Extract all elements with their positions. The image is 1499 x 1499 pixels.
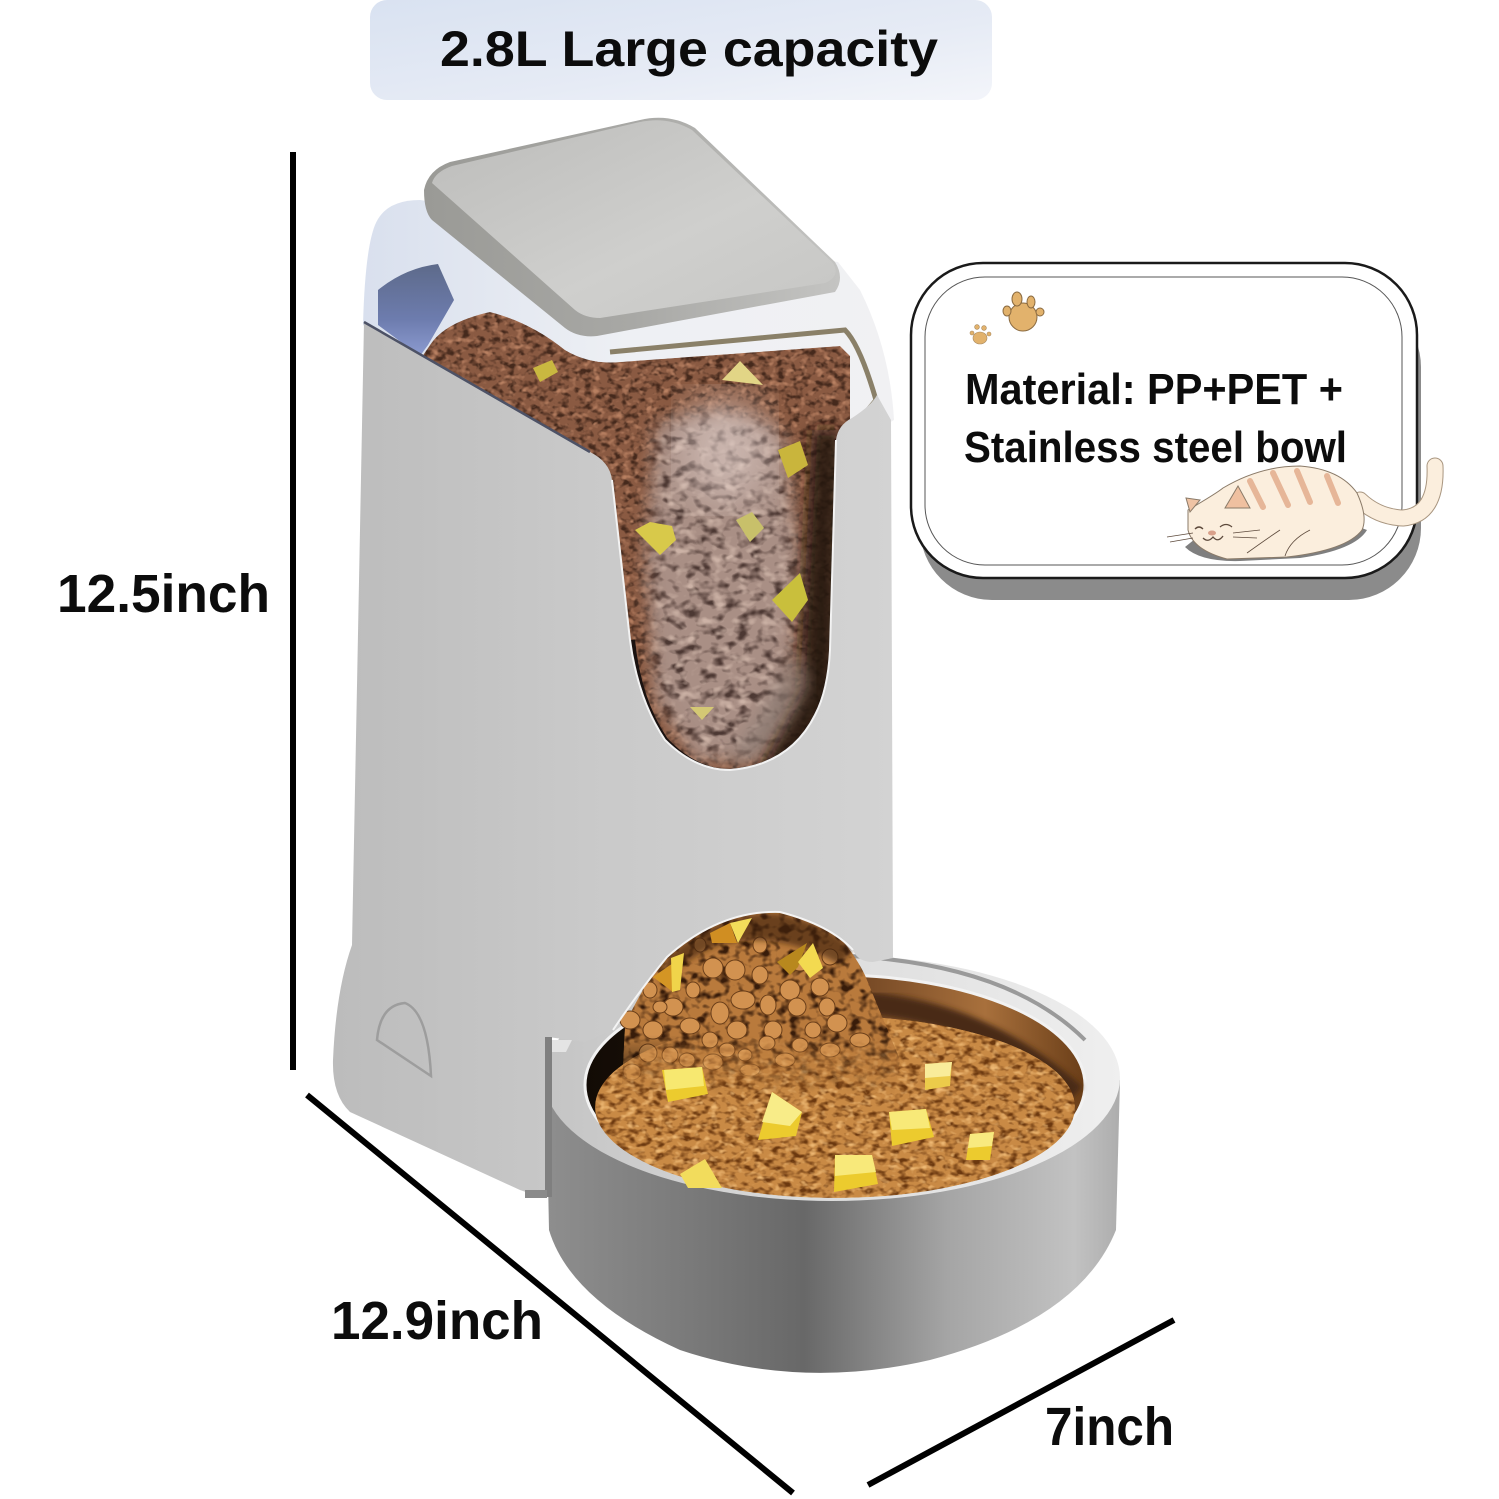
bowl interior (585, 975, 1085, 1195)
hopper stored food (420, 312, 850, 780)
material text (964, 365, 1347, 472)
hopper frame band (610, 330, 876, 432)
window white edge line (612, 440, 836, 770)
illustration: sleeping cat (1167, 466, 1435, 561)
arch white edge line (613, 912, 853, 1030)
hopper dark glass band (760, 430, 840, 772)
icon: small paw (970, 325, 991, 344)
bowl rim (544, 955, 1120, 1201)
dimension label: height: 12.5inch (57, 564, 270, 624)
material callout card (911, 263, 1435, 600)
bowl treat cubes (653, 918, 994, 1192)
material text: Material: PP+PET + (965, 365, 1343, 414)
cat body (1188, 466, 1364, 559)
dimension: width line (868, 1320, 1174, 1485)
falling kibble mound (620, 912, 900, 1092)
hopper food centre column (635, 404, 807, 768)
bowl kibble (595, 1016, 1075, 1198)
hopper blue reflection (378, 264, 454, 356)
bowl interior brown streak (850, 1002, 1075, 1095)
card inner line (925, 277, 1402, 565)
bowl outer wall (546, 1080, 1120, 1373)
dimension label: depth: 12.9inch (331, 1291, 543, 1351)
hopper smoky lower corner (725, 650, 808, 765)
bowl back rim band (850, 956, 1085, 1040)
dimension label: width: 7inch (1045, 1397, 1174, 1457)
cat near ear (1225, 486, 1250, 508)
icon: large paw (1003, 292, 1044, 331)
lid (424, 118, 840, 336)
material text: Stainless steel bowl (964, 423, 1347, 472)
cat far ear (1186, 498, 1200, 512)
title pill: 2.8L Large capacity: 2.8L Large capacity (440, 21, 938, 77)
card shadow (920, 295, 1421, 600)
cat face (1167, 524, 1310, 556)
clear hopper back (363, 200, 894, 470)
dimension: depth line (307, 1095, 793, 1493)
feeder body shell (333, 322, 893, 1197)
base slot plate (525, 1037, 572, 1198)
cat nose (1208, 530, 1216, 536)
body side emboss: half-round tab (377, 1003, 431, 1076)
card outer frame (911, 263, 1417, 578)
window dark edge (632, 440, 838, 772)
mound dark top shading (660, 914, 853, 985)
cat tail (1360, 466, 1435, 518)
hopper treat cubes (533, 360, 808, 720)
cat shadow (1185, 520, 1367, 561)
cat stripes (1250, 471, 1338, 507)
hopper slant edge line (364, 322, 590, 452)
feeder: product illustration (333, 118, 1120, 1373)
dimension: height line (290, 152, 296, 1070)
title pill: 2.8L Large capacity (370, 0, 992, 100)
